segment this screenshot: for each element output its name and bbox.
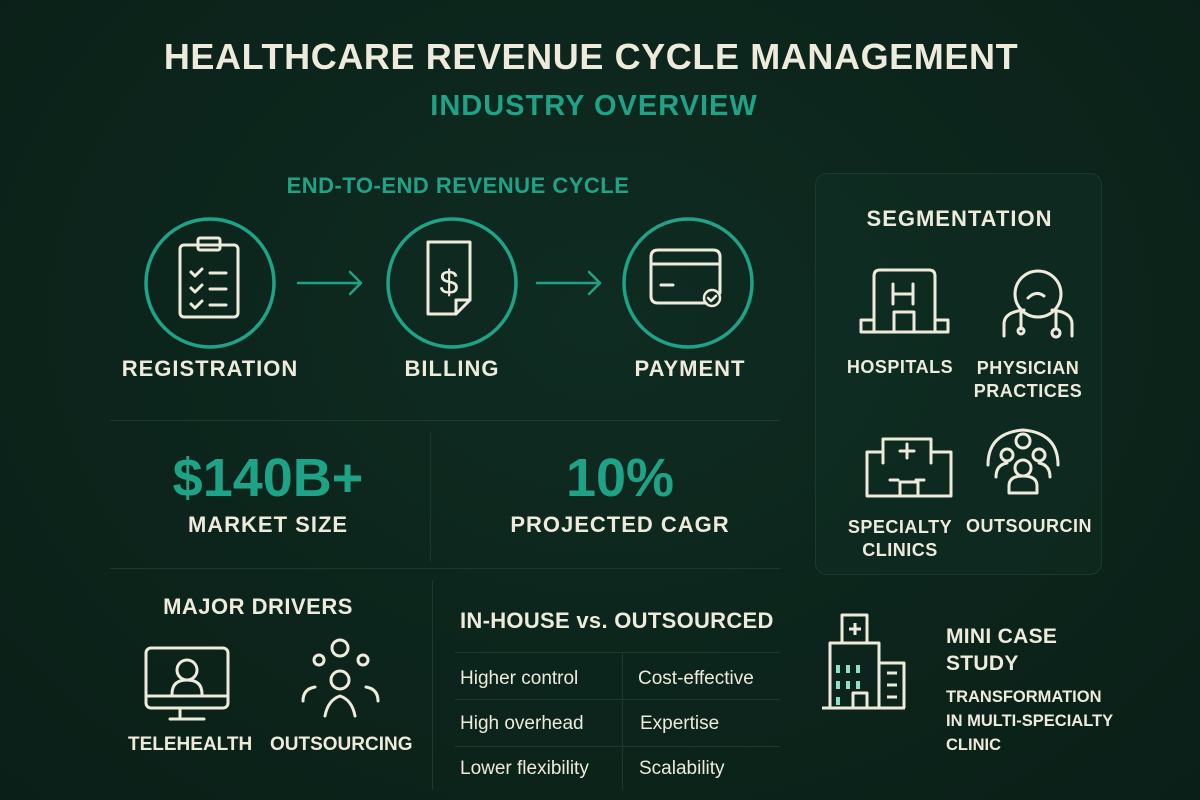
icon: payment card bbox=[624, 219, 752, 347]
stat: market size bbox=[173, 448, 363, 537]
title: HEALTHCARE REVENUE CYCLE MANAGEMENT bbox=[164, 36, 1018, 77]
comparison table: in-house vs outsourced bbox=[455, 608, 780, 790]
section heading: revenue cycle: END-TO-END REVENUE CYCLE bbox=[287, 173, 629, 198]
panel: segmentation: SPECIALTY bbox=[848, 517, 952, 537]
panel: segmentation: PHYSICIAN bbox=[977, 358, 1079, 378]
step labels: REGISTRATION bbox=[122, 356, 298, 381]
icon: clinic building bbox=[822, 614, 906, 710]
mini case study: MINI CASE bbox=[946, 625, 1057, 648]
stat: CAGR: 10% bbox=[566, 448, 674, 508]
mini case study: IN MULTI-SPECIALTY bbox=[946, 712, 1113, 730]
revenue cycle flow bbox=[144, 217, 754, 349]
arrow bbox=[537, 272, 600, 294]
segment icons bbox=[860, 268, 1074, 498]
panel: segmentation: HOSPITALS bbox=[847, 357, 953, 377]
mini case study: STUDY bbox=[946, 652, 1019, 675]
comparison table: in-house vs outsourced: Higher control bbox=[460, 668, 578, 689]
mini case study: CLINIC bbox=[946, 736, 1001, 754]
mini case study bbox=[822, 614, 1113, 754]
stat: market size: $140B+ bbox=[173, 448, 363, 508]
icons: telehealth, outsourcing bbox=[144, 638, 380, 720]
comparison table: in-house vs outsourced: IN-HOUSE vs. OUTSOURCED bbox=[460, 608, 774, 633]
mini case study: TRANSFORMATION bbox=[946, 688, 1102, 706]
section: major drivers bbox=[128, 594, 412, 755]
stat: CAGR: PROJECTED CAGR bbox=[510, 512, 730, 537]
panel: segmentation: CLINICS bbox=[862, 540, 938, 560]
comparison table: in-house vs outsourced: Cost-effective bbox=[638, 668, 754, 689]
comparison table: in-house vs outsourced: Lower flexibility bbox=[460, 758, 589, 779]
stat: CAGR bbox=[510, 448, 730, 537]
heading: SEGMENTATION bbox=[867, 206, 1052, 231]
section: major drivers: TELEHEALTH bbox=[128, 734, 252, 755]
comparison table: in-house vs outsourced: Scalability bbox=[639, 758, 725, 779]
section: major drivers: OUTSOURCING bbox=[270, 734, 412, 755]
panel: segmentation: PRACTICES bbox=[974, 381, 1082, 401]
section: major drivers: MAJOR DRIVERS bbox=[163, 594, 353, 619]
icon: billing document: $ bbox=[440, 264, 459, 302]
text: PAYMENT bbox=[635, 356, 745, 381]
icon: registration clipboard bbox=[146, 219, 274, 347]
comparison table: in-house vs outsourced: High overhead bbox=[460, 713, 584, 734]
stat: market size: MARKET SIZE bbox=[188, 512, 348, 537]
arrow bbox=[298, 272, 361, 294]
text: BILLING bbox=[404, 356, 500, 381]
panel: segmentation bbox=[815, 173, 1102, 575]
subtitle: INDUSTRY OVERVIEW bbox=[430, 90, 758, 122]
comparison table: in-house vs outsourced: Expertise bbox=[640, 713, 719, 734]
icon: billing document bbox=[388, 219, 516, 347]
panel: segmentation: OUTSOURCIN bbox=[966, 516, 1092, 536]
